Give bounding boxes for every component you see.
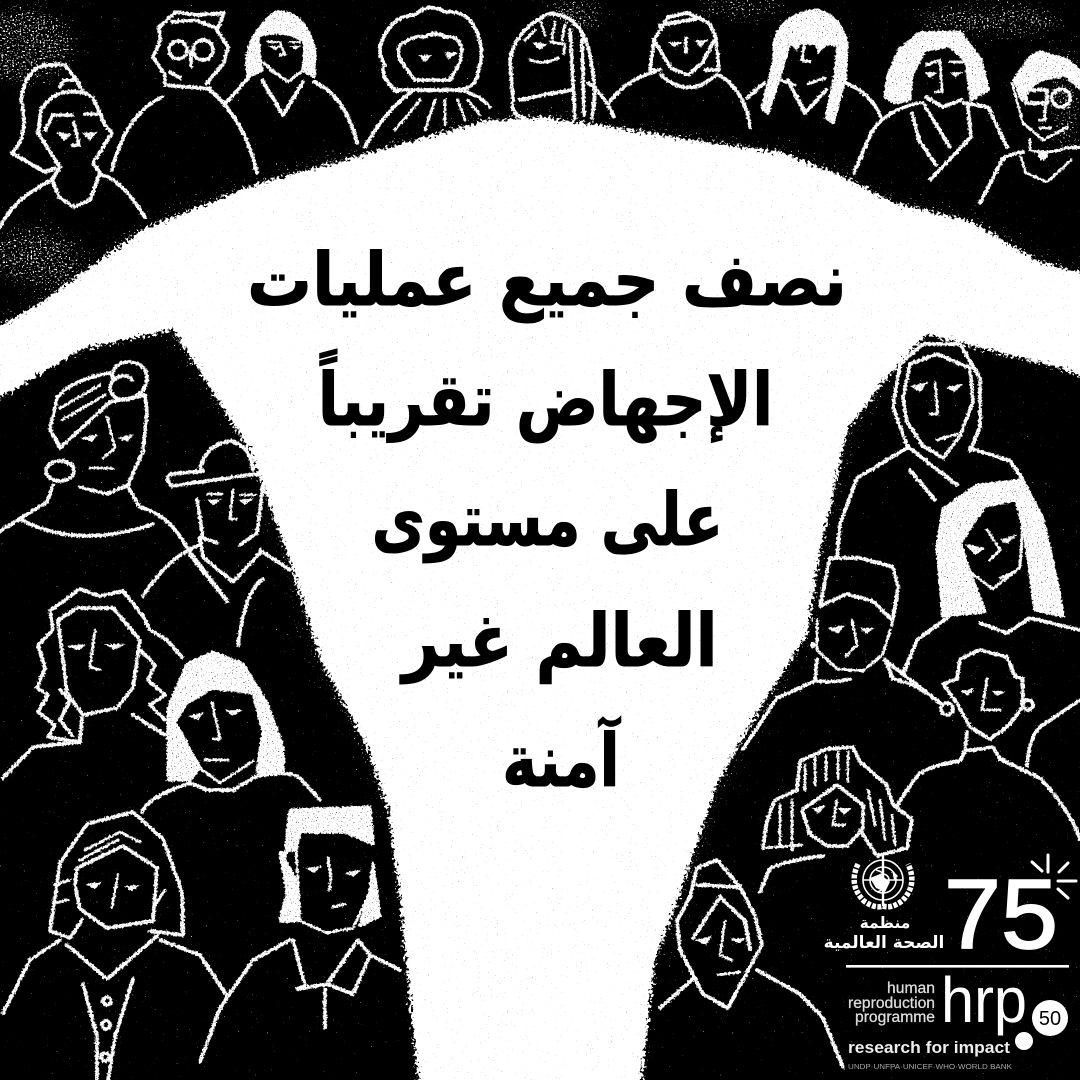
person: woman with swirl turban xyxy=(0,362,227,601)
person: woman with hood xyxy=(837,344,1022,558)
person: top left with hair tied back xyxy=(0,65,145,227)
research for impact tagline: research for impact xyxy=(848,1039,1011,1057)
person: woman with center parted hair and buttons xyxy=(3,812,227,1080)
person: man with light flat top hair xyxy=(200,807,400,1062)
WHO Arabic name: الصحة العالمية xyxy=(824,933,944,953)
sponsors line: UNDP·UNFPA·UNICEF·WHO·WORLD BANK xyxy=(848,1062,1012,1071)
person: woman with bouffant hair xyxy=(760,747,917,892)
logos block xyxy=(824,855,1076,1071)
person: woman with small buns and earrings xyxy=(885,650,1080,839)
WHO emblem xyxy=(854,855,912,907)
HRP descriptor text xyxy=(848,980,935,1026)
HRP descriptor text: reproduction xyxy=(848,995,935,1012)
person: man with rectangle glasses xyxy=(980,52,1080,203)
heading line 3: على مستوى xyxy=(372,478,723,564)
person: woman with curly hair xyxy=(365,8,490,147)
HRP dot xyxy=(1015,1032,1033,1050)
HRP descriptor text: human xyxy=(887,980,935,997)
heading line 4: العالم غير xyxy=(400,599,718,684)
heading line 5: آمنة xyxy=(502,716,622,804)
person: woman with headscarf xyxy=(609,13,750,127)
heading line 2: الإجهاض تقريباً xyxy=(318,348,773,443)
person: woman with light hair xyxy=(226,12,357,143)
person: woman with short curly light hair xyxy=(854,32,1007,180)
person: woman with light hair and bangs xyxy=(142,652,320,812)
divider line xyxy=(846,965,1069,968)
person: woman with round hat xyxy=(743,558,940,749)
person: woman with wavy hair xyxy=(3,589,182,778)
person: man with cap xyxy=(143,441,290,645)
HRP wordmark: hrp xyxy=(941,964,1027,1036)
person: woman with long center parted hair xyxy=(747,10,881,123)
person: woman with long light hair xyxy=(903,480,1080,674)
HRP 50 badge: 50 xyxy=(1039,1008,1061,1030)
HRP 50 badge xyxy=(1032,1000,1068,1036)
WHO Arabic name: منظمة xyxy=(860,914,910,932)
WHO Arabic name xyxy=(824,914,944,953)
person: woman with long braids xyxy=(510,14,614,118)
person: older woman with top bun xyxy=(660,860,843,1067)
main Arabic heading xyxy=(247,238,847,804)
75 anniversary mark: 75 xyxy=(944,859,1058,969)
HRP descriptor text: programme xyxy=(855,1009,935,1026)
person: man with round glasses xyxy=(112,12,257,173)
heading line 1: نصف جميع عمليات xyxy=(247,238,847,323)
